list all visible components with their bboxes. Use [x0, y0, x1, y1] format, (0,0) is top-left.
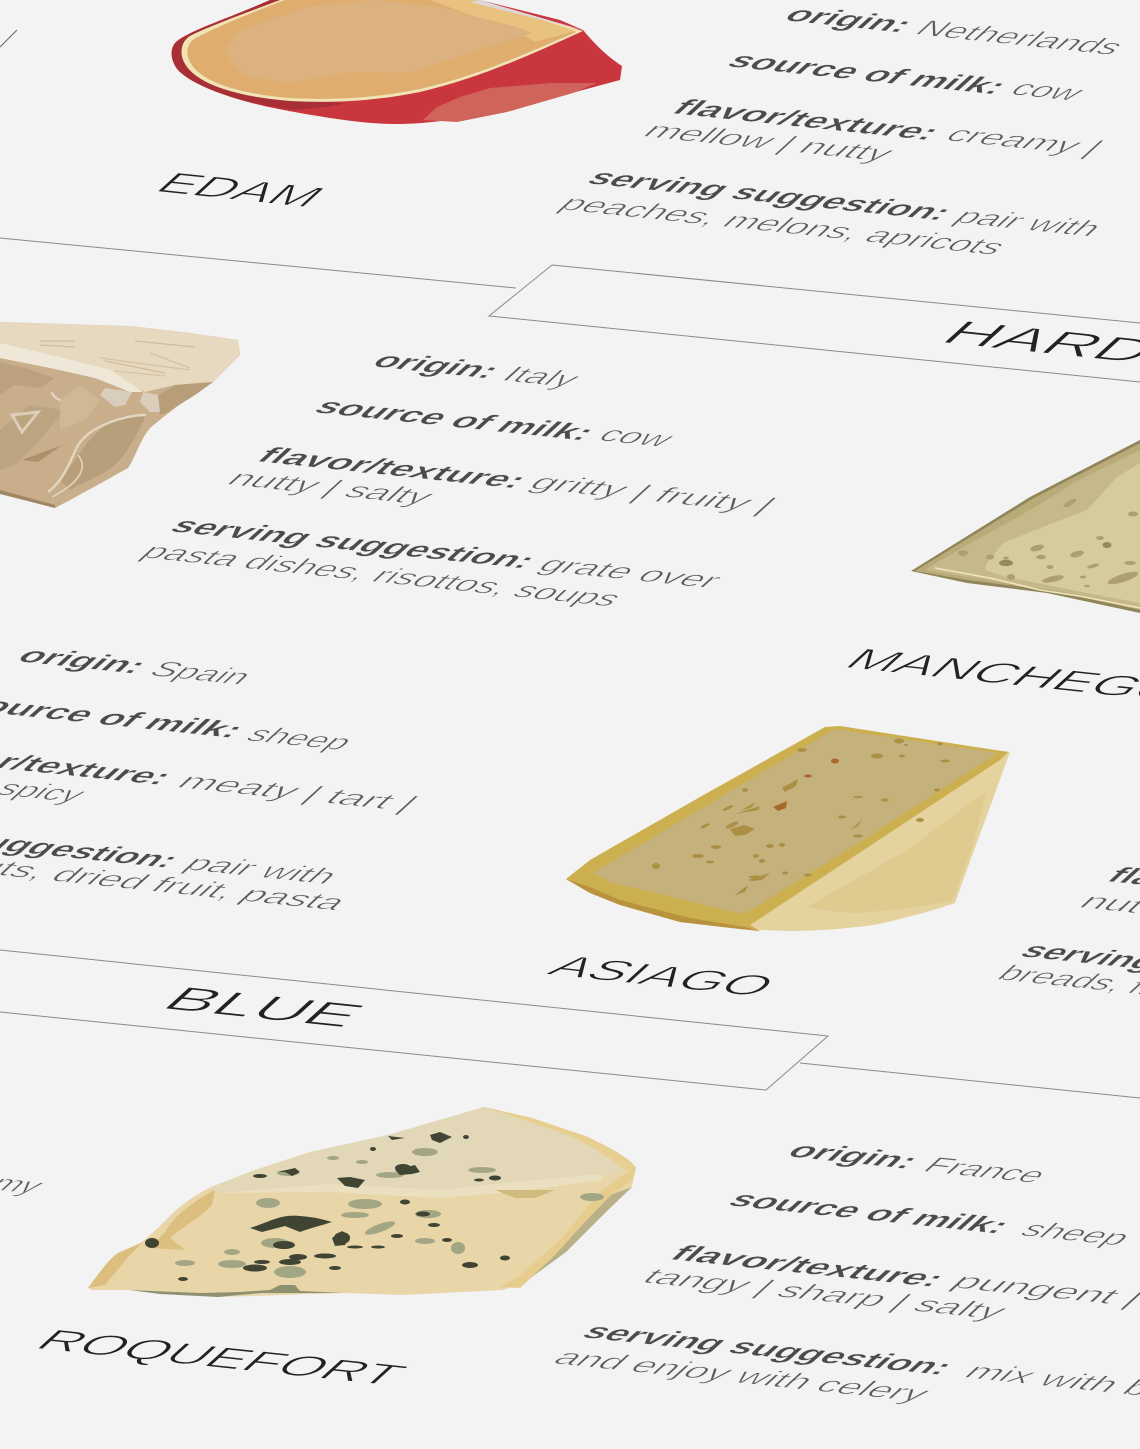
text block: Edam facts: mellow | nutty [636, 118, 902, 166]
text block: Roquefort facts: source of milk: [721, 1187, 1017, 1238]
text block: Roquefort facts: mix with b [957, 1359, 1140, 1401]
text block: Parmesan facts: source of milk: [307, 394, 602, 445]
illustration: Edam cheese [172, 0, 622, 124]
text block: Manchego facts: origin: [10, 643, 154, 678]
text block: Roquefort facts [546, 1138, 1140, 1406]
text block: Manchego facts [0, 643, 425, 915]
text block: Parmesan facts: serving suggestion: [163, 513, 543, 573]
text block: Manchego facts: sheep [239, 722, 360, 755]
text block: Manchego facts: meaty | tart | [170, 769, 425, 816]
label: MANCHEGO: MANCHEGO [835, 642, 1140, 708]
text block: Roquefort facts: origin: [780, 1138, 926, 1174]
text block: Roquefort facts: sheep [1013, 1217, 1138, 1250]
text block: Edam facts: origin: [777, 2, 920, 37]
text block: Roquefort facts: and enjoy with celery [546, 1345, 938, 1406]
section divider: BLUE [0, 950, 1140, 1098]
text block: Edam facts: cow [1003, 76, 1092, 105]
illustration: Parmesan cheese [0, 322, 240, 508]
text block: Edam facts: Netherlands [908, 16, 1131, 60]
section divider: HARD: HARD [931, 314, 1140, 370]
text block: Edam facts: serving suggestion: [580, 165, 959, 225]
text block: Edam facts: flavor/texture: [665, 95, 947, 145]
text block: Parmesan facts: cow [591, 422, 682, 452]
section divider: HARD [0, 238, 1140, 382]
fragment: text slash at top left [0, 30, 17, 47]
text block: Roquefort facts: serving suggestion: [575, 1319, 960, 1380]
label: ROQUEFORT: ROQUEFORT [26, 1323, 417, 1391]
text block: Asiago facts [990, 863, 1140, 1004]
text block: Edam facts: creamy | [938, 122, 1110, 160]
text block: Edam facts: peaches, melons, apricots [552, 191, 1013, 260]
text block: Parmesan facts: gritty | fruity | [522, 470, 783, 518]
text block: Parmesan facts: nutty | salty [220, 466, 442, 510]
text block: Manchego facts: Spain [142, 657, 259, 689]
text block: Parmesan facts: Italy [495, 362, 588, 392]
text block: Edam facts: source of milk: [720, 48, 1014, 99]
text block: Roquefort facts: France [916, 1153, 1054, 1188]
text block: Parmesan facts [134, 348, 783, 611]
text block: Edam facts: pair with [947, 204, 1109, 241]
text block: Parmesan facts: pasta dishes, risottos, soups [134, 539, 629, 611]
text block: Edam facts [552, 2, 1131, 260]
label: EDAM: EDAM [146, 166, 336, 213]
illustration: Manchego cheese [911, 440, 1140, 613]
text block: Roquefort facts: flavor/texture: [663, 1241, 952, 1292]
illustration: Roquefort cheese [88, 1107, 636, 1297]
text block: Parmesan facts: origin: [365, 348, 507, 383]
text block: Roquefort facts: tangy | sharp | salty [635, 1264, 1016, 1324]
label: ASIAGO: ASIAGO [538, 949, 787, 1003]
text block: Parmesan facts: grate over [531, 552, 729, 593]
section divider: BLUE: BLUE [152, 980, 376, 1034]
text block: Manchego facts: pair with [177, 851, 345, 889]
text block: Roquefort facts: pungent | [944, 1269, 1140, 1311]
illustration: Asiago cheese [566, 726, 1010, 931]
text block: Parmesan facts: flavor/texture: [250, 443, 534, 493]
